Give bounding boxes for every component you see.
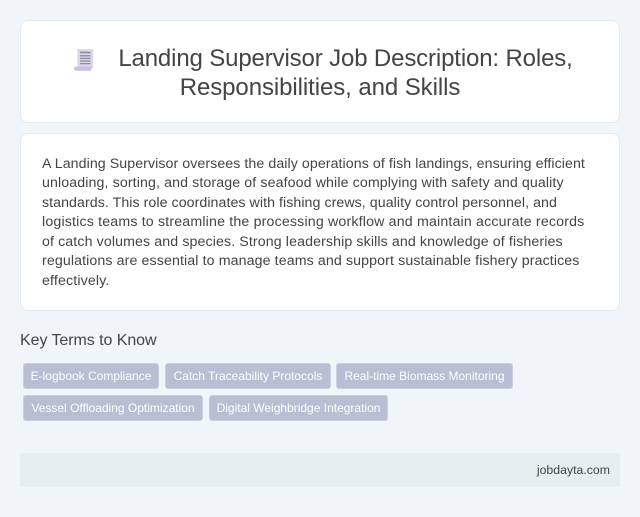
tag [209, 395, 388, 421]
description panel [20, 133, 620, 311]
tag [165, 363, 331, 389]
header panel [20, 20, 620, 123]
footer bar [20, 453, 620, 487]
description text: A Landing Supervisor oversees the daily operations of fish landings, ensuring efficient [42, 156, 585, 172]
title: Landing Supervisor Job Description: Roles, [118, 45, 573, 72]
description text: standards. This role coordinates with fishing crews, quality control personnel, and [42, 194, 557, 210]
tag [23, 395, 203, 421]
description text: of catch volumes and species. Strong leadership skills and knowledge of fisheries [42, 234, 563, 250]
tag [23, 363, 159, 389]
tag: Vessel Offloading Optimization [31, 401, 195, 415]
key term tags [23, 363, 513, 421]
heading: key terms: Key Terms to Know [20, 332, 157, 349]
title [118, 45, 573, 101]
tag: Real-time Biomass Monitoring [344, 369, 505, 383]
footer source: jobdayta.com [537, 463, 610, 477]
description text [42, 156, 585, 288]
tag: Digital Weighbridge Integration [217, 401, 380, 415]
title: Responsibilities, and Skills [180, 74, 460, 101]
tag: Catch Traceability Protocols [174, 369, 322, 383]
icon: document scroll [74, 49, 94, 71]
tag: E-logbook Compliance [31, 369, 151, 383]
description text: logistics teams to streamline the processing workflow and maintain accurate records [42, 214, 584, 230]
description text: unloading, sorting, and storage of seafood while complying with safety and quality [42, 175, 564, 191]
description text: effectively. [42, 272, 110, 288]
description text: regulations are essential to manage teams and support sustainable fishery practices [42, 253, 580, 269]
tag [336, 363, 513, 389]
